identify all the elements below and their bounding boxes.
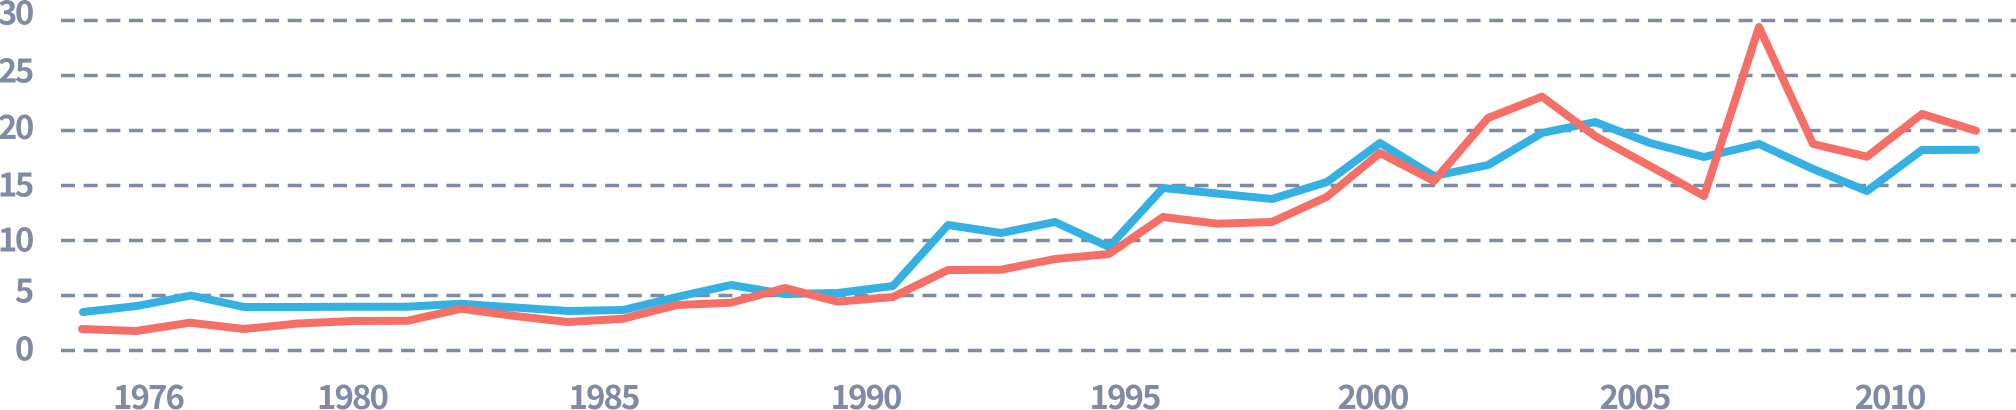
red data line <box>82 27 1976 331</box>
horizontal dashed grid lines <box>61 20 2016 350</box>
blue data line <box>83 122 1976 312</box>
y-axis labels <box>0 0 34 370</box>
y-axis labels: 0 <box>15 322 34 370</box>
x-axis labels <box>113 371 1926 410</box>
y-axis labels: 5 <box>15 264 33 312</box>
